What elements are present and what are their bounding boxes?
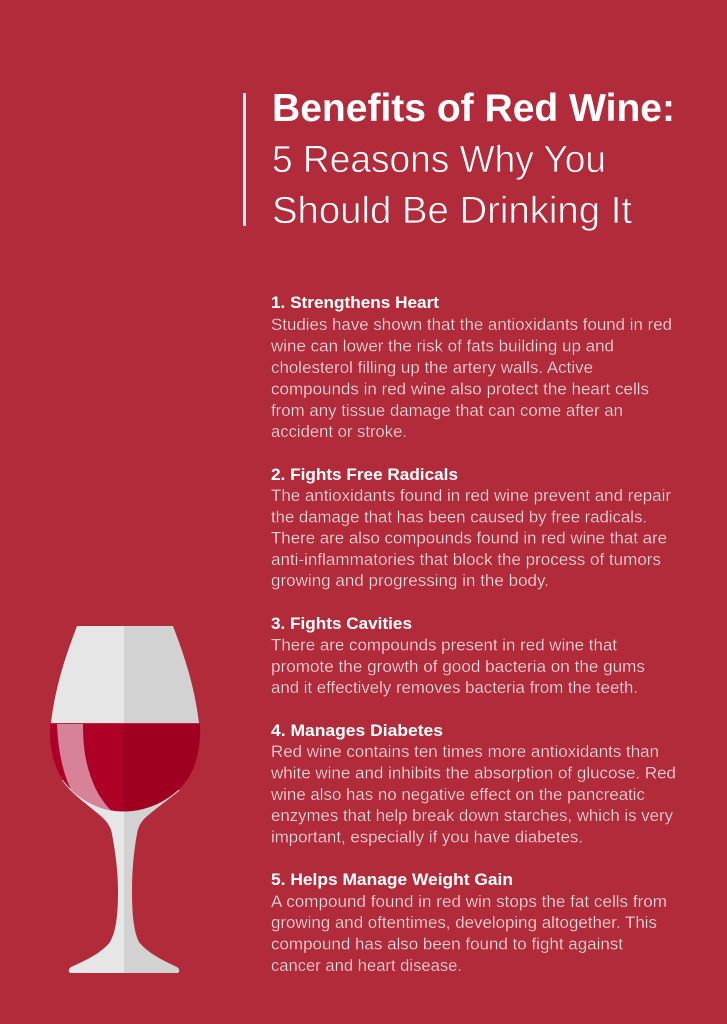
section 4: manages diabetes: important, especially if you have diabetes.: [271, 828, 583, 846]
title: [272, 87, 675, 232]
section 1: strengthens heart: 1. Strengthens Heart: [271, 294, 440, 312]
title divider bar: [243, 93, 246, 226]
section 5: helps manage weight gain: A compound found in red win stops the fat cells from: [271, 893, 667, 911]
glass bowl upper right: [124, 626, 199, 723]
section 1: strengthens heart: cholesterol filling up the artery walls. Active: [271, 359, 593, 377]
wine left: [50, 724, 124, 812]
section 2: fights free radicals: anti-inflammatories that block the process of tumors: [271, 551, 661, 569]
section 1: strengthens heart: compounds in red wine also protect the heart cells: [271, 380, 649, 398]
section 1: strengthens heart: [270, 294, 672, 441]
section 4: manages diabetes: [270, 722, 676, 846]
section 2: fights free radicals: There are also compounds found in red wine that are: [271, 530, 667, 548]
section 4: manages diabetes: 4. Manages Diabetes: [271, 722, 443, 740]
title: 5 Reasons Why You: [272, 139, 606, 181]
section 5: helps manage weight gain: growing and oftentimes, developing altogether. This: [271, 914, 657, 932]
section 2: fights free radicals: 2. Fights Free Radicals: [271, 466, 458, 484]
wine right: [124, 724, 200, 812]
section 1: strengthens heart: from any tissue damage that can come after an: [271, 402, 623, 420]
section 5: helps manage weight gain: [271, 871, 667, 975]
title: Benefits of Red Wine:: [272, 87, 675, 130]
section 1: strengthens heart: accident or stroke.: [271, 423, 407, 441]
wine highlight: [57, 724, 111, 810]
icon: wine glass: [50, 626, 200, 973]
section 2: fights free radicals: [271, 466, 672, 590]
section 3: fights cavities: and it effectively removes bacteria from the teeth.: [271, 679, 638, 697]
section 2: fights free radicals: the damage that has been caused by free radicals.: [271, 508, 647, 526]
section 1: strengthens heart: wine can lower the risk of fats building up and: [270, 338, 614, 356]
title: Should Be Drinking It: [272, 190, 632, 232]
section 2: fights free radicals: growing and progressing in the body.: [271, 572, 549, 590]
section 5: helps manage weight gain: 5. Helps Manage Weight Gain: [271, 871, 513, 889]
section 3: fights cavities: [271, 615, 645, 697]
section 4: manages diabetes: enzymes that help break down starches, which is very: [271, 807, 674, 825]
section 3: fights cavities: 3. Fights Cavities: [271, 615, 412, 633]
section 1: strengthens heart: Studies have shown that the antioxidants found in red: [271, 316, 672, 334]
stem and base right: [124, 790, 180, 973]
section 5: helps manage weight gain: compound has also been found to fight against: [271, 936, 623, 954]
section 3: fights cavities: promote the growth of good bacteria on the gums: [271, 658, 645, 676]
section 2: fights free radicals: The antioxidants found in red wine prevent and repair: [271, 487, 672, 505]
stem and base left: [62, 780, 124, 973]
section 4: manages diabetes: white wine and inhibits the absorption of glucose. Red: [270, 764, 676, 782]
section 5: helps manage weight gain: cancer and heart disease.: [271, 957, 462, 975]
section 4: manages diabetes: wine also has no negative effect on the pancreatic: [270, 786, 645, 804]
glass bowl upper left: [51, 626, 124, 723]
section 4: manages diabetes: Red wine contains ten times more antioxidants than: [271, 743, 659, 761]
section 3: fights cavities: There are compounds present in red wine that: [271, 636, 617, 654]
